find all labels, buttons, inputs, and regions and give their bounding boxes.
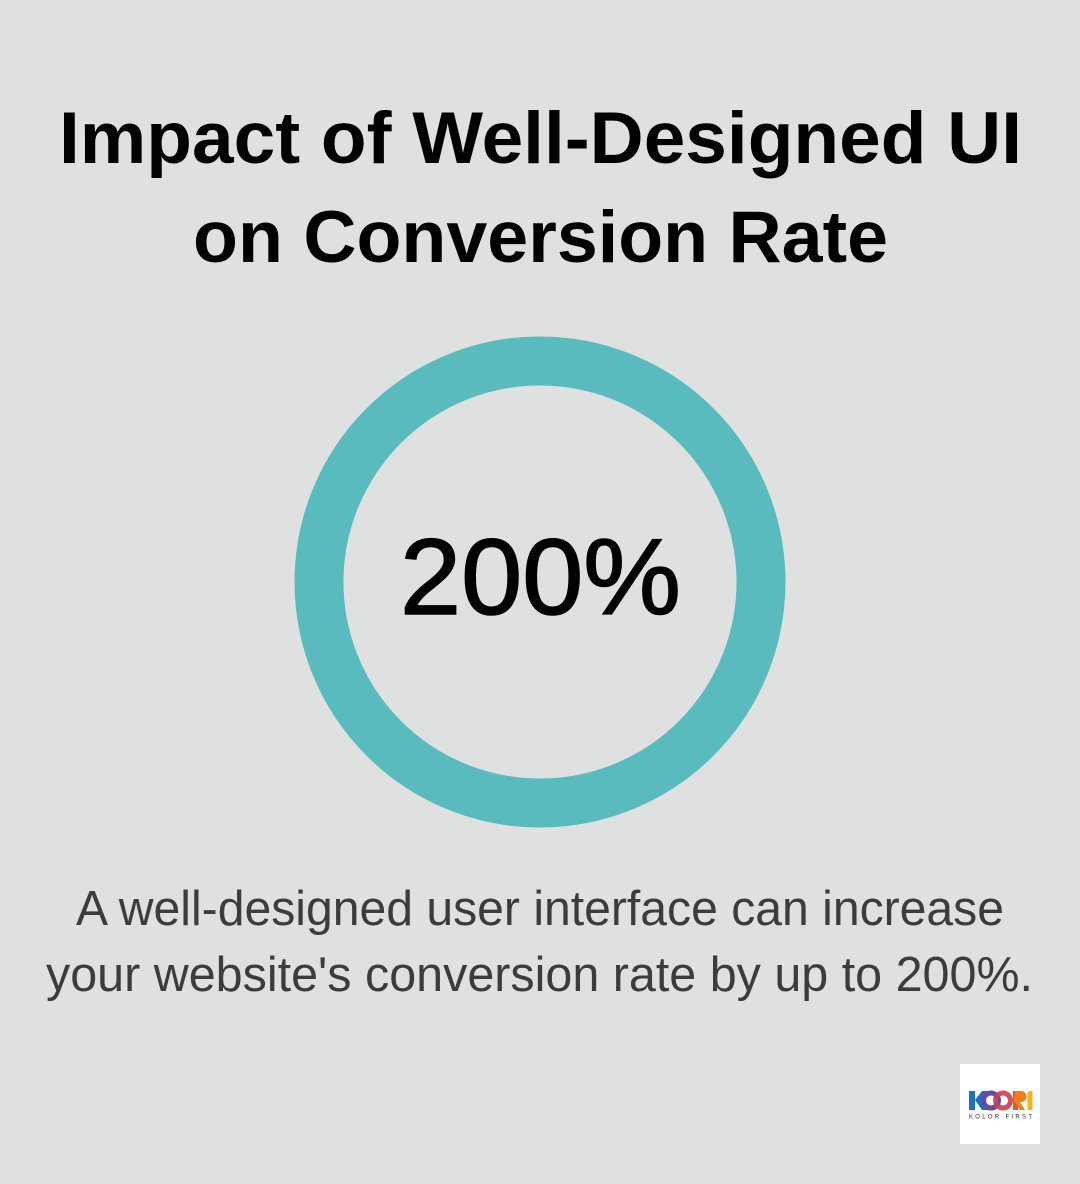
title: Impact of Well-Designed UI bbox=[59, 98, 1022, 179]
logo: Koori Kolor First bbox=[960, 1064, 1040, 1144]
title bbox=[59, 98, 1022, 278]
description text: A well-designed user interface can increase bbox=[76, 882, 1004, 936]
central figure: 200%: 200% bbox=[400, 516, 681, 637]
title: on Conversion Rate bbox=[193, 197, 888, 278]
logo letters R 1 bbox=[1013, 1091, 1032, 1110]
description text: your website's conversion rate by up to 200%. bbox=[46, 948, 1033, 1002]
logo letter K bbox=[969, 1091, 989, 1110]
logo letters O O bbox=[984, 1093, 1010, 1108]
logo tagline: KOLOR FIRST bbox=[969, 1114, 1032, 1120]
description text bbox=[46, 882, 1033, 1002]
donut ring: 200% bbox=[319, 361, 761, 803]
